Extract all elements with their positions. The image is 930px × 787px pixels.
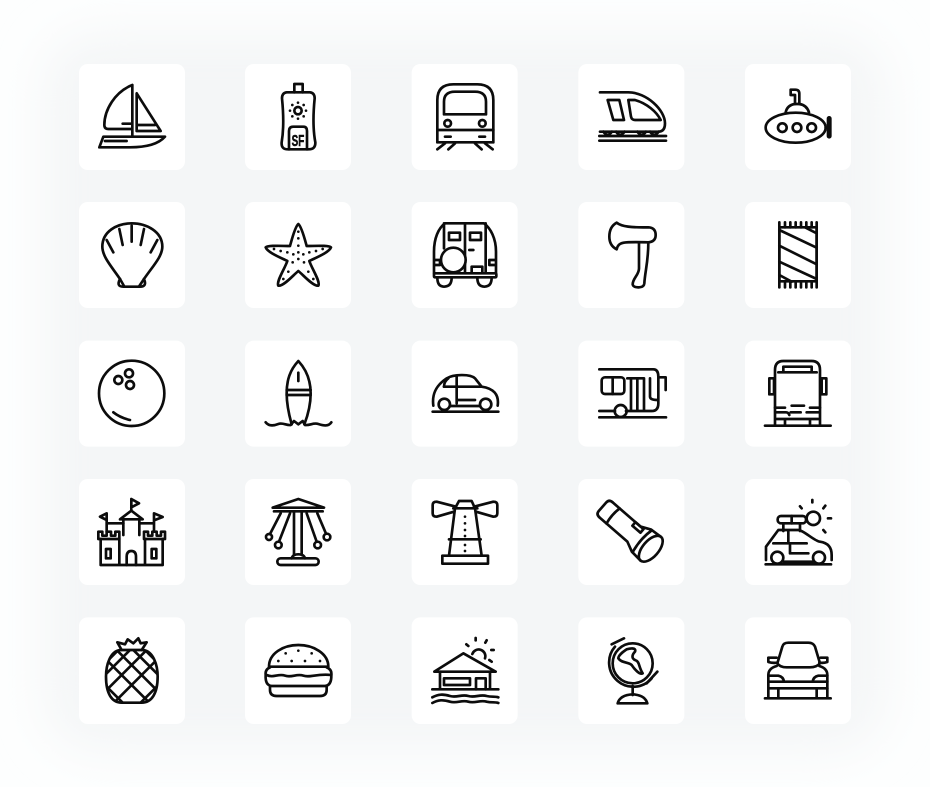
panel: sunscreen bottle — [245, 64, 351, 170]
panel: seashell — [79, 202, 185, 308]
panel: small car — [412, 341, 518, 447]
panel: burger — [245, 617, 351, 724]
panel: beach towel — [745, 202, 851, 308]
panel: city bus side — [578, 341, 684, 447]
panel: globe — [578, 617, 684, 724]
panel: sunscreen bottle: SF — [292, 133, 304, 150]
panel: flashlight — [578, 479, 684, 585]
panel: pineapple — [79, 617, 185, 724]
panel: swing carousel — [245, 479, 351, 585]
panel: axe — [578, 202, 684, 308]
panel: sailboat — [79, 64, 185, 170]
panel: bowling ball — [79, 341, 185, 447]
panel: starfish — [245, 202, 351, 308]
panel: train front — [412, 64, 518, 170]
panel: car with roof luggage — [745, 479, 851, 585]
panel: camper van — [412, 202, 518, 308]
panel: lighthouse — [412, 479, 518, 585]
panel: bus front — [745, 341, 851, 447]
panel: car front — [745, 617, 851, 724]
panel: surfboard — [245, 341, 351, 447]
panel: beach house — [412, 617, 518, 724]
panel: submarine — [745, 64, 851, 170]
panel: bullet train — [578, 64, 684, 170]
panel: sandcastle — [79, 479, 185, 585]
